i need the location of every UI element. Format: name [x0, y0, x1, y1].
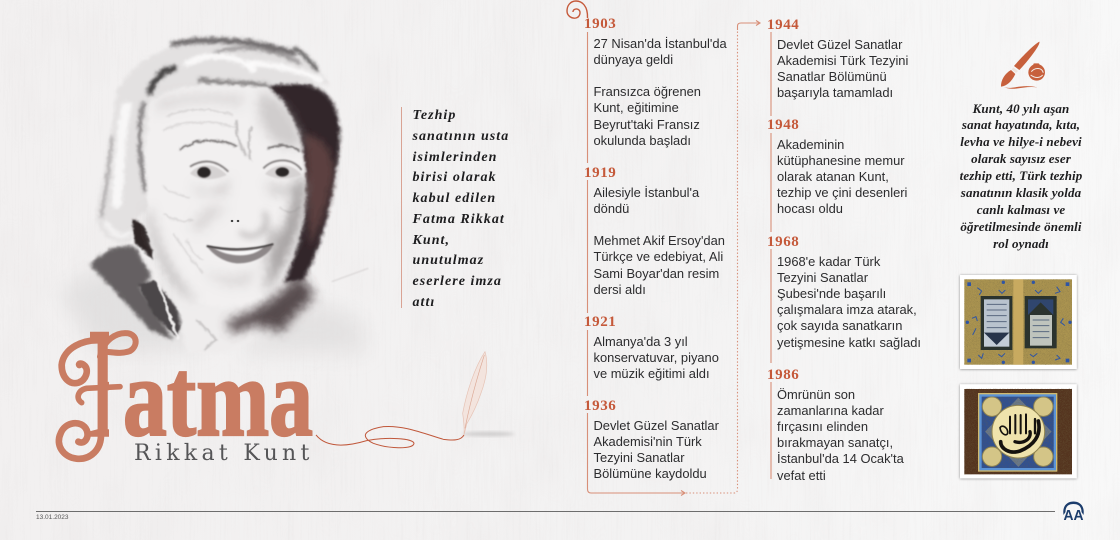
footer rule: [36, 510, 1055, 512]
hair light: [97, 37, 330, 242]
1903 entry: 27 Nisan'da İstanbul'da: [594, 36, 727, 50]
1936 entry: Bölümüne kaydoldu: [594, 466, 707, 481]
side note text: sanat hayatında, kıta,: [962, 117, 1080, 132]
1968 entry: çalışmalara imza atarak,: [777, 302, 917, 317]
1948 entry: Akademinin: [777, 136, 844, 152]
right side stray mark: [332, 268, 368, 282]
quote text: unutulmaz: [412, 253, 484, 268]
side note text: tezhip etti, Türk tezhip: [960, 168, 1082, 183]
1986 entry: Ömrünün son: [777, 386, 855, 402]
1986 entry: fırçasını elinden: [777, 419, 868, 434]
quote text: sanatının usta: [412, 129, 509, 144]
1944 entry: 1944: [767, 17, 799, 33]
1936 entry: [584, 398, 719, 481]
1903 entry: okulunda başladı: [594, 133, 691, 148]
1919 entry: dersi aldı: [594, 282, 646, 297]
side note text: olarak sayısız eser: [971, 151, 1071, 166]
1968 entry: 1968'e kadar Türk: [777, 254, 880, 268]
1936 entry: Tezyini Sanatlar: [594, 450, 684, 465]
subtitle: Rikkat Kunt: Rikkat Kunt: [134, 441, 314, 466]
1903 entry: 1903: [584, 16, 616, 32]
1919 entry: Türkçe ve edebiyat, Ali: [594, 249, 723, 264]
forehead and cheek wrinkles: [163, 110, 300, 273]
quote text: Fatma Rikkat: [412, 212, 505, 227]
1936 entry: 1936: [584, 398, 616, 414]
icon: AA logo: AA: [1064, 507, 1084, 524]
1968 entry: çok sayıda sanatkarın: [777, 318, 902, 333]
1948 entry: tezhip ve çini desenleri: [777, 185, 907, 200]
quote text: kabul edilen: [412, 191, 496, 206]
1919 entry: 1919: [584, 165, 616, 181]
mouth: [207, 244, 273, 263]
neck and collar: [173, 290, 257, 353]
side note text: canlı kalması ve: [977, 202, 1065, 217]
quote block with rule: [401, 107, 509, 310]
face shading: [148, 92, 305, 300]
1986 entry: zamanlarına kadar: [777, 403, 884, 418]
side note text: öğretilmesinde önemli: [960, 219, 1082, 234]
1944 entry: Akademisi Türk Tezyini: [777, 53, 908, 68]
title: Fatma: atma: [123, 337, 313, 460]
1903 entry: [584, 16, 727, 148]
quote text: isimlerinden: [412, 150, 497, 164]
1921 entry: Almanya'da 3 yıl: [594, 334, 688, 348]
1968 entry: [767, 234, 921, 350]
1968 entry: 1968: [767, 234, 799, 250]
brows: [180, 141, 237, 149]
side note text: sanatının klasik yolda: [961, 185, 1081, 200]
quote text: Tezhip: [412, 108, 456, 123]
1944 entry: başarıyla tamamladı: [777, 85, 893, 100]
title: Fatma: [56, 330, 312, 462]
side note text: rol oynadı: [993, 236, 1049, 251]
1986 entry: İstanbul'da 14 Ocak'ta: [777, 451, 904, 466]
quote text: birisi olarak: [412, 170, 497, 185]
1948 entry: [767, 117, 907, 216]
side note text: Kunt, 40 yılı aşan: [973, 100, 1069, 116]
1948 entry: kütüphanesine memur: [777, 153, 905, 168]
eyes: [190, 160, 302, 179]
1903 entry: Fransızca öğrenen: [594, 84, 701, 99]
quote text: eserlere imza: [412, 274, 502, 289]
1921 entry: 1921: [584, 314, 616, 330]
1986 entry: bırakmayan sanatçı,: [777, 435, 893, 450]
1921 entry: konservatuvar, piyano: [594, 350, 719, 365]
side note text: [960, 100, 1082, 251]
timeline column 2: [767, 17, 921, 483]
title swashes: [59, 333, 136, 459]
1921 entry: ve müzik eğitimi aldı: [594, 366, 710, 381]
1903 entry: Beyrut'taki Fransız: [594, 117, 700, 132]
1936 entry: Devlet Güzel Sanatlar: [594, 418, 719, 432]
hair dark back: [267, 83, 340, 283]
1948 entry: 1948: [767, 117, 799, 133]
1986 entry: vefat etti: [777, 468, 826, 483]
quote text: [412, 108, 509, 310]
quote text: Kunt,: [412, 232, 450, 248]
1986 entry: 1986: [767, 367, 799, 383]
face: [147, 86, 305, 307]
date: 13.01.2023: [36, 514, 69, 521]
nose: [240, 212, 266, 236]
1919 entry: Mehmet Akif Ersoy'dan: [594, 233, 725, 248]
1986 entry: [767, 367, 904, 483]
1944 entry: [767, 17, 908, 100]
quote rule: [401, 107, 402, 308]
1944 entry: Sanatlar Bölümünü: [777, 69, 887, 84]
shoulders: [60, 268, 207, 350]
1968 entry: Tezyini Sanatlar: [777, 270, 868, 285]
quote text: attı: [412, 295, 435, 310]
side note text: levha ve hilye-i nebevi: [960, 134, 1082, 149]
timeline column 1: [584, 16, 727, 481]
1919 entry: döndü: [594, 201, 629, 216]
1968 entry: Şubesi'nde başarılı: [777, 286, 886, 301]
1903 entry: dünyaya geldi: [594, 52, 673, 67]
1944 entry: Devlet Güzel Sanatlar: [777, 36, 902, 52]
1948 entry: hocası oldu: [777, 201, 843, 216]
1919 entry: [584, 165, 725, 297]
1936 entry: Akademisi'nin Türk: [594, 434, 702, 449]
1919 entry: Ailesiyle İstanbul'a: [594, 184, 699, 200]
1903 entry: Kunt, eğitimine: [594, 100, 679, 115]
1968 entry: yetişmesine katkı sağladı: [777, 335, 921, 350]
title: Fatma: F: [87, 297, 141, 471]
1919 entry: Sami Boyar'dan resim: [594, 266, 719, 281]
1948 entry: olarak atanan Kunt,: [777, 169, 889, 184]
1921 entry: [584, 314, 719, 381]
